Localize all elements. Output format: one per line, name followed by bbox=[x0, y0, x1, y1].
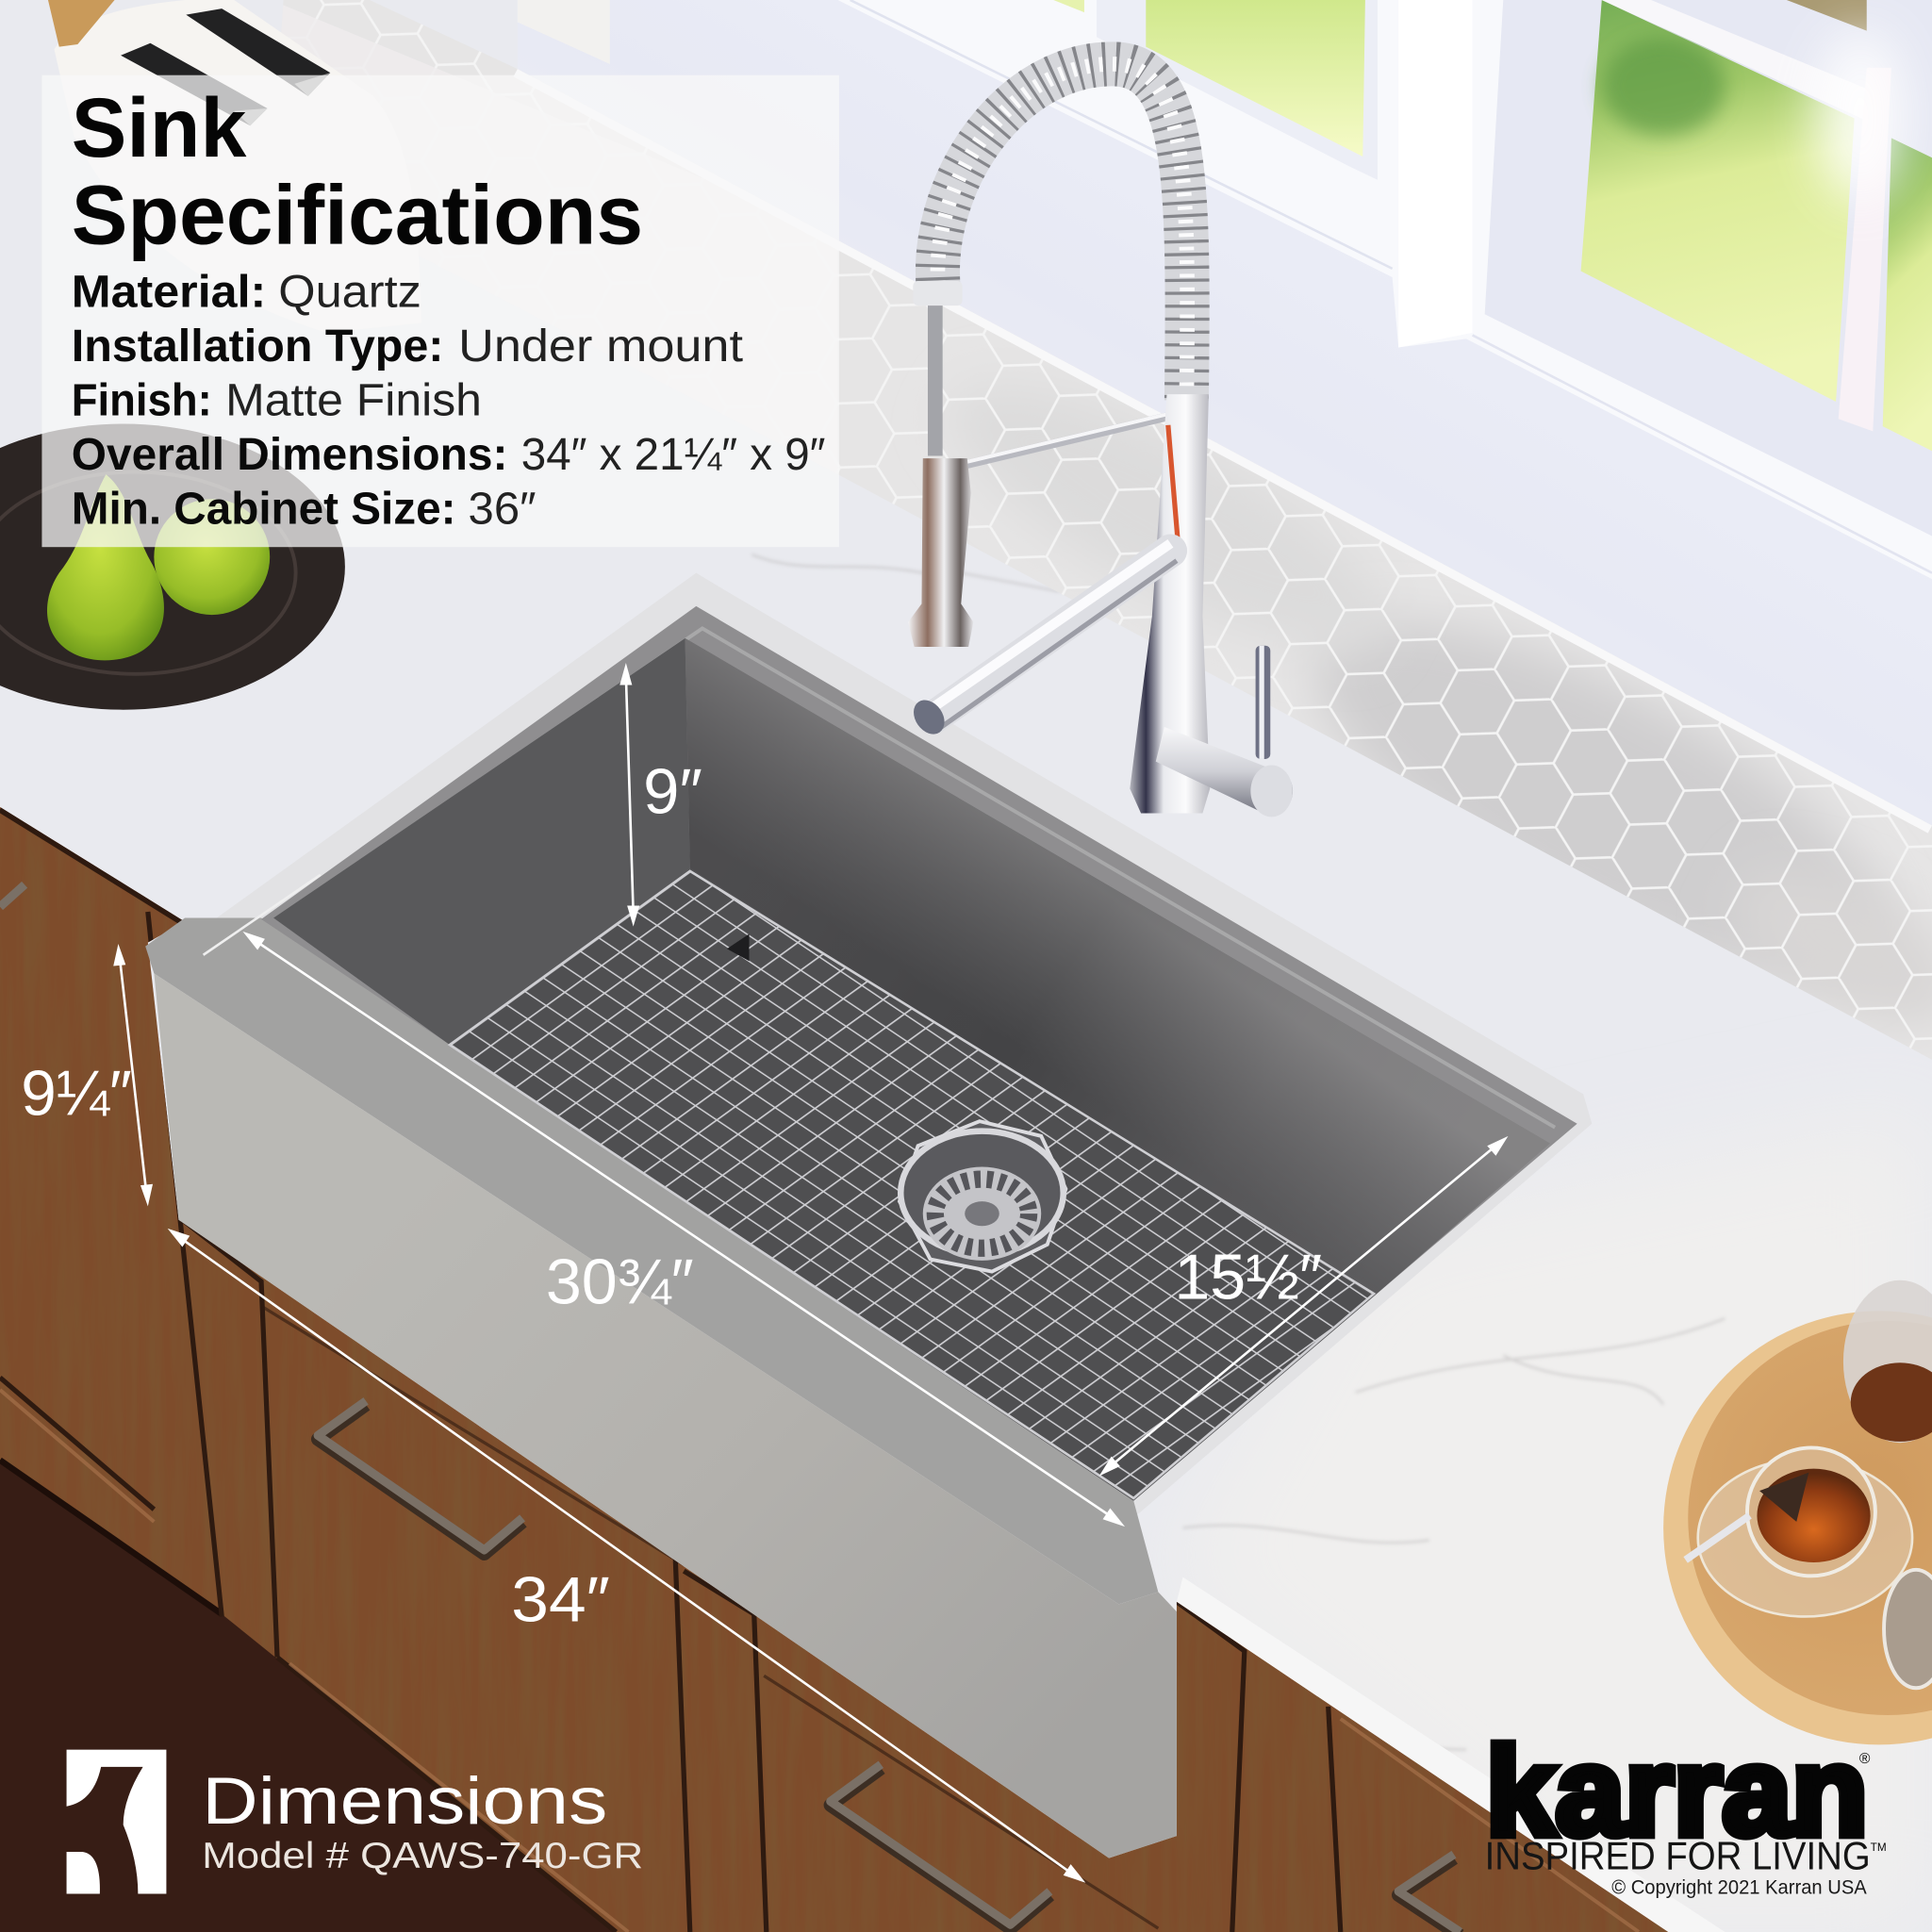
heading: sink specifications: Sink bbox=[72, 81, 247, 174]
backsplash: hexagonal marble tile bbox=[283, 0, 1932, 1060]
label: 9 inch: 9″ bbox=[643, 755, 702, 827]
cabinets and floor bbox=[0, 807, 1668, 1932]
wall: window sill bbox=[518, 0, 1932, 826]
logo: Karran: © Copyright 2021 Karran USA bbox=[1611, 1876, 1867, 1898]
window glass: left pane bbox=[1146, 0, 1365, 157]
arrow: 34 inch overall length bbox=[168, 1229, 1085, 1883]
faucet bbox=[907, 64, 1293, 817]
bowl with pears bbox=[0, 424, 345, 710]
title: dimensions and model number: Dimensions bbox=[202, 1763, 607, 1838]
spec list: Installation Type: bbox=[72, 321, 443, 372]
small jar bbox=[1884, 1570, 1932, 1688]
hose bbox=[928, 302, 943, 456]
spec list: Matte Finish bbox=[225, 374, 482, 425]
logo: Karran: TM bbox=[1871, 1841, 1887, 1854]
cabinet seams bbox=[0, 912, 1341, 1932]
spec list: Material: bbox=[72, 266, 266, 317]
tea tray bbox=[1663, 1280, 1932, 1744]
arrow: 9 and a quarter inch apron bbox=[113, 944, 153, 1206]
spec list: Overall Dimensions: bbox=[72, 429, 507, 480]
side wall bbox=[273, 638, 690, 1045]
logo: Karran: karran bbox=[1486, 1722, 1868, 1862]
spec list: Min. Cabinet Size: bbox=[72, 483, 456, 534]
drain bbox=[900, 1121, 1065, 1272]
rim bbox=[191, 573, 1592, 1540]
logo: Karran: ® bbox=[1859, 1751, 1871, 1767]
apron top band bbox=[145, 918, 1158, 1604]
label: 9 and a quarter inch: 9¼″ bbox=[21, 1058, 132, 1130]
floor bbox=[0, 1461, 616, 1932]
toaster bbox=[48, 0, 421, 333]
spec list: 36″ bbox=[469, 483, 536, 534]
label: 34 inch: 34″ bbox=[511, 1564, 610, 1636]
inner lip bbox=[261, 606, 1577, 1501]
saucer and glass cup bbox=[1698, 1459, 1912, 1616]
sink bbox=[145, 573, 1592, 1858]
sink floor bbox=[450, 868, 1374, 1501]
arrow: 30 and three quarter inch basin length bbox=[242, 932, 1125, 1527]
label: 15 and a half inch: 15½″ bbox=[1174, 1241, 1322, 1313]
dimension labels bbox=[21, 755, 1322, 1636]
wall: white cabinet box at top bbox=[518, 0, 610, 64]
arrow: 9 inch depth bbox=[619, 663, 639, 927]
spout bbox=[934, 551, 1170, 718]
spec list: 34″ x 21¼″ x 9″ bbox=[521, 429, 826, 480]
label: 30 and three quarter inch: 30¾″ bbox=[546, 1247, 694, 1318]
column bbox=[1130, 394, 1210, 813]
heading: sink specifications bbox=[72, 81, 643, 262]
counter shadow bbox=[0, 810, 185, 924]
cabinet handles bbox=[318, 1405, 1461, 1932]
back wall bbox=[685, 638, 1550, 1296]
panel: sink specifications bbox=[41, 75, 839, 547]
spec list: Under mount bbox=[458, 321, 744, 372]
handle bbox=[1156, 727, 1293, 816]
window frame and panes bbox=[838, 0, 1932, 579]
counter edge front right bbox=[1177, 1577, 1725, 1932]
apron face bbox=[154, 973, 1177, 1858]
spec list: Quartz bbox=[278, 266, 421, 317]
spec list: Finish: bbox=[72, 374, 212, 425]
window glass: right pane bbox=[1581, 0, 1855, 402]
icon: Karran R logo mark bbox=[67, 1750, 166, 1893]
arrow: 15 and a half inch basin width bbox=[1099, 1136, 1508, 1476]
wire grid bbox=[450, 871, 1374, 1498]
spec list bbox=[72, 266, 826, 534]
teapot bbox=[1843, 1280, 1932, 1443]
dimension arrows bbox=[113, 663, 1508, 1883]
spring coil bbox=[937, 64, 1187, 401]
heading: sink specifications: Specifications bbox=[72, 169, 643, 262]
title: dimensions and model number bbox=[202, 1763, 643, 1876]
spray head bbox=[908, 458, 973, 647]
title: dimensions and model number: Model # QAWS-740-GR bbox=[202, 1836, 643, 1876]
cross bar bbox=[961, 417, 1168, 466]
logo: Karran: INSPIRED FOR LIVING bbox=[1485, 1833, 1871, 1877]
